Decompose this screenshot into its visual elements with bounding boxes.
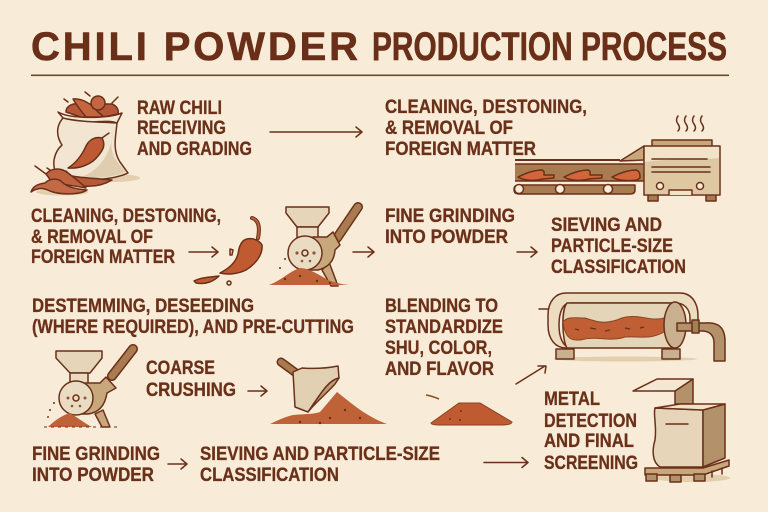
text: sieving right: CLASSIFICATION <box>551 257 686 278</box>
text: cleaning top: & REMOVAL OF <box>385 118 513 139</box>
text: destemming: DESTEMMING, DESEEDING <box>32 296 254 317</box>
text: destemming: (WHERE REQUIRED), AND PRE-CUTTING <box>32 317 354 338</box>
icon: conveyor and dryer <box>514 116 720 201</box>
text: blending: STANDARDIZE <box>385 317 503 338</box>
text: sieving right <box>551 215 686 278</box>
text: destemming <box>32 296 354 338</box>
arrow <box>353 247 374 257</box>
text: coarse crushing <box>146 358 236 401</box>
text: cleaning top: CLEANING, DESTONING, <box>385 97 587 118</box>
text: metal detection: AND FINAL <box>544 431 634 452</box>
text: blending: SHU, COLOR, <box>385 338 492 359</box>
icon: grinder <box>269 207 358 286</box>
text: fine grinding right: FINE GRINDING <box>385 206 515 227</box>
icon: chili on sack <box>68 133 109 168</box>
text: sieving lower: SIEVING AND PARTICLE-SIZE <box>200 444 440 465</box>
arrow <box>189 247 218 257</box>
text: fine grinding lower <box>32 444 160 486</box>
text: raw chili: AND GRADING <box>137 139 252 160</box>
icon: powder pile <box>426 395 512 425</box>
text: sieving right: PARTICLE-SIZE <box>551 236 673 257</box>
arrow <box>168 459 187 469</box>
icon: bag on pallet <box>633 379 730 482</box>
text: blending <box>385 296 503 380</box>
text: raw chili <box>137 98 252 160</box>
title <box>31 25 727 69</box>
icon: scoop and pile <box>270 362 387 424</box>
powder pile <box>269 268 350 285</box>
arrow <box>270 127 362 137</box>
text: coarse crushing: COARSE <box>146 358 215 379</box>
text: raw chili: RAW CHILI <box>137 98 222 119</box>
arrow <box>248 386 267 396</box>
text: fine grinding right <box>385 206 515 248</box>
icon: loose chilies <box>31 166 112 194</box>
icon: grinder lower <box>44 349 133 427</box>
icon: drum blender <box>539 293 725 362</box>
text: fine grinding lower: INTO POWDER <box>32 465 154 486</box>
text: cleaning row 2: FOREIGN MATTER <box>31 247 175 268</box>
icon: chili sack <box>31 92 140 196</box>
powder pile <box>48 413 92 427</box>
text: cleaning row 2 <box>31 206 221 268</box>
text: metal detection: DETECTION <box>544 411 637 432</box>
arrow <box>484 458 528 468</box>
text: cleaning top <box>385 97 587 160</box>
text: cleaning row 2: & REMOVAL OF <box>31 227 153 248</box>
text: metal detection <box>544 389 638 474</box>
text: blending: AND FLAVOR <box>385 359 494 380</box>
text: cleaning top: FOREIGN MATTER <box>385 139 536 160</box>
text: fine grinding right: INTO POWDER <box>385 227 508 248</box>
arrow <box>516 366 546 384</box>
icon: cut chili <box>194 218 262 285</box>
text: sieving right: SIEVING AND <box>551 215 662 236</box>
text: cleaning row 2: CLEANING, DESTONING, <box>31 206 221 227</box>
text: metal detection: SCREENING <box>544 453 638 474</box>
text: coarse crushing: CRUSHING <box>146 380 236 401</box>
text: fine grinding lower: FINE GRINDING <box>32 444 160 465</box>
text: blending: BLENDING TO <box>385 296 498 317</box>
title: CHILI POWDER <box>31 25 358 69</box>
text: sieving lower <box>200 444 440 486</box>
text: raw chili: RECEIVING <box>137 118 226 139</box>
arrow <box>517 247 537 257</box>
text: sieving lower: CLASSIFICATION <box>200 465 339 486</box>
text: metal detection: METAL <box>544 389 600 410</box>
